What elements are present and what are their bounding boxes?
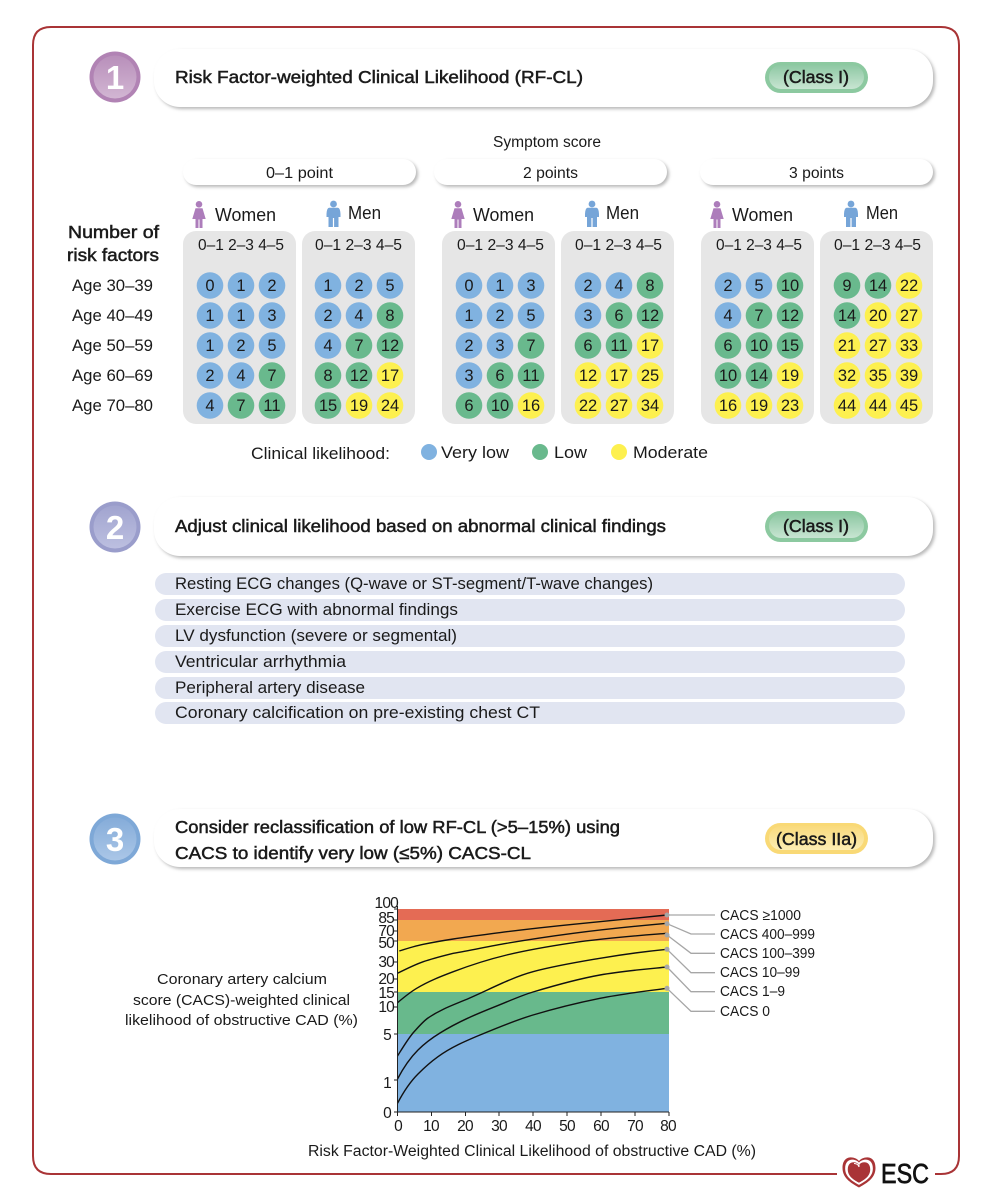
panel: women, 2 points: 6 (464, 397, 474, 415)
panel: women, 3 points: 5 (754, 277, 764, 295)
step 2 header bar (154, 497, 933, 556)
panel: men, 0-1 point: 2 (354, 277, 364, 295)
likelihood chart: 30 (491, 1118, 508, 1135)
abnormal findings list: Ventricular arrhythmia (175, 652, 347, 671)
likelihood chart: 20 (378, 971, 395, 988)
step 3 badge: 3 (106, 821, 124, 858)
symptom pill: 3 points (700, 159, 933, 185)
panel: men, 3 points: 33 (900, 337, 918, 355)
panel: men, 0-1 point: 12 (350, 367, 368, 385)
panel: men, 3 points: 44 (869, 397, 887, 415)
panel: women, 3 points: 10 (750, 337, 768, 355)
CACS curve labels: CACS 400–999 (720, 927, 815, 943)
panel: women, 0-1 point: 2 (236, 337, 246, 355)
panel: women, 0-1 point: 7 (236, 397, 246, 415)
panel: men, 0-1 point: 15 (319, 397, 337, 415)
likelihood chart: 50 (378, 935, 395, 952)
likelihood chart: 1 (383, 1075, 391, 1092)
panel: women, 3 points: 19 (750, 397, 768, 415)
CACS curve labels: CACS 10–99 (720, 965, 800, 981)
women label, group 2: Women (473, 205, 534, 225)
abnormal findings list: Coronary calcification on pre-existing chest CT (175, 703, 540, 722)
panel: men, 3 points: 22 (900, 277, 918, 295)
panel: women, 0-1 point (183, 231, 296, 424)
panel: women, 2 points: 2 (464, 337, 474, 355)
step 3 header bar: Consider reclassification of low RF-CL (>5–15%) using (175, 817, 620, 837)
panel: women, 2 points: 0–1 2–3 4–5 (457, 237, 544, 254)
panel: men, 3 points: 27 (869, 337, 887, 355)
panel: women, 2 points: 1 (495, 277, 505, 295)
step 3 header bar (154, 809, 933, 867)
likelihood chart: 70 (627, 1118, 644, 1135)
panel: men, 3 points: 44 (838, 397, 856, 415)
panel: women, 2 points: 0 (464, 277, 474, 295)
panel: women, 3 points: 2 (723, 277, 733, 295)
step 1 header bar (154, 49, 933, 107)
likelihood chart (375, 895, 677, 1135)
panel: women, 0-1 point: 1 (205, 337, 215, 355)
CACS curve labels: CACS ≥1000 (720, 908, 801, 924)
panel: men, 2 points: 11 (610, 337, 628, 355)
legend: clinical likelihood: Moderate (633, 443, 708, 462)
panel: men, 2 points: 0–1 2–3 4–5 (575, 237, 662, 254)
panel: women, 0-1 point: 1 (236, 277, 246, 295)
panel: women, 0-1 point: 11 (263, 397, 281, 415)
women label, group 2 (451, 201, 534, 228)
men label, group 1: Men (348, 203, 381, 223)
panel: women, 0-1 point: 4 (205, 397, 215, 415)
panel: men, 2 points: 6 (583, 337, 593, 355)
step 2 class badge: (Class I) (783, 516, 849, 536)
panel: men, 0-1 point: 19 (350, 397, 368, 415)
y axis title: score (CACS)-weighted clinical (133, 992, 350, 1009)
age row labels: Age 70–80 (72, 397, 153, 415)
CACS curve labels: CACS 0 (720, 1004, 770, 1020)
panel: women, 2 points: 2 (495, 307, 505, 325)
symptom pill: 0-1 point: 0–1 point (266, 165, 334, 182)
likelihood chart: 80 (660, 1118, 677, 1135)
men label, group 2 (585, 201, 639, 227)
men label, group 2: Men (606, 203, 639, 223)
panel: men, 3 points: 14 (869, 277, 887, 295)
step 2 header bar: Adjust clinical likelihood based on abnormal clinical findings (175, 516, 666, 536)
panel: women, 3 points: 10 (719, 367, 737, 385)
panel: men, 3 points: 27 (900, 307, 918, 325)
panel: men, 0-1 point (302, 231, 415, 424)
legend: clinical likelihood (251, 443, 708, 463)
step 2 badge: 2 (106, 509, 124, 546)
step 3 class badge (765, 823, 868, 854)
panel: women, 3 points: 6 (723, 337, 733, 355)
panel: women, 3 points: 4 (723, 307, 733, 325)
y axis title (125, 971, 358, 1029)
women label, group 3 (710, 201, 793, 228)
panel: men, 3 points: 35 (869, 367, 887, 385)
CACS curve labels (720, 908, 815, 1020)
step 3 class badge: (Class IIa) (776, 829, 857, 849)
panel: women, 3 points: 12 (781, 307, 799, 325)
panel: men, 0-1 point: 24 (381, 397, 399, 415)
panel: men, 2 points: 17 (641, 337, 659, 355)
ESC logo (842, 1157, 929, 1189)
panel: men, 3 points: 9 (842, 277, 852, 295)
women label, group 3: Women (732, 205, 793, 225)
symptom pill: 0-1 point (183, 159, 416, 185)
step 2 badge (90, 502, 140, 552)
panel: women, 2 points: 6 (495, 367, 505, 385)
panel: women, 3 points: 14 (750, 367, 768, 385)
likelihood chart: 40 (525, 1118, 542, 1135)
women label, group 1: Women (215, 205, 276, 225)
panel: men, 3 points: 39 (900, 367, 918, 385)
panel: men, 2 points: 4 (614, 277, 624, 295)
men label, group 3 (844, 201, 898, 227)
step 1 class badge: (Class I) (783, 67, 849, 87)
panel: women, 0-1 point: 4 (236, 367, 246, 385)
likelihood chart: 50 (559, 1118, 576, 1135)
panel: men, 0-1 point: 7 (354, 337, 364, 355)
row heading: number of risk factors: Number of (68, 222, 159, 242)
symptom pill: 3 points: 3 points (789, 165, 844, 182)
panel: women, 0-1 point: 7 (267, 367, 277, 385)
step 1 header bar: Risk Factor-weighted Clinical Likelihood (RF-CL) (175, 67, 583, 87)
panel: men, 0-1 point: 12 (381, 337, 399, 355)
abnormal findings list (155, 573, 905, 724)
men label, group 3: Men (866, 203, 898, 223)
likelihood chart: 30 (378, 954, 395, 971)
age row labels: Age 50–59 (72, 337, 153, 355)
symptom score heading: Symptom score (493, 134, 601, 151)
panel: women, 0-1 point: 1 (236, 307, 246, 325)
age row labels: Age 60–69 (72, 367, 153, 385)
age row labels: Age 40–49 (72, 307, 153, 325)
step 1 badge (90, 52, 140, 102)
panel: men, 0-1 point: 2 (323, 307, 333, 325)
abnormal findings list: Peripheral artery disease (175, 678, 365, 697)
panel: men, 3 points (820, 231, 933, 424)
panel: men, 2 points: 12 (641, 307, 659, 325)
step 1 class badge (765, 62, 868, 93)
likelihood chart: 5 (383, 1027, 391, 1044)
likelihood chart: 15 (378, 985, 394, 1002)
panel: men, 2 points: 27 (610, 397, 628, 415)
panel: men, 2 points (561, 231, 674, 424)
likelihood chart: 0 (394, 1118, 403, 1135)
panel: women, 0-1 point: 0 (205, 277, 215, 295)
panel: women, 3 points: 15 (781, 337, 799, 355)
panel: women, 2 points: 16 (522, 397, 540, 415)
likelihood chart: 0 (383, 1105, 392, 1122)
panel: women, 3 points: 10 (781, 277, 799, 295)
step 2 class badge (765, 511, 868, 542)
panel: women, 0-1 point: 3 (267, 307, 277, 325)
likelihood chart: 60 (593, 1118, 610, 1135)
panel: women, 0-1 point: 2 (267, 277, 277, 295)
panel: men, 3 points: 14 (838, 307, 856, 325)
panel: women, 3 points: 16 (719, 397, 737, 415)
panel: women, 3 points: 23 (781, 397, 799, 415)
panel: men, 2 points: 17 (610, 367, 628, 385)
panel: men, 0-1 point: 8 (323, 367, 333, 385)
panel: women, 2 points: 3 (495, 337, 505, 355)
panel: men, 2 points: 34 (641, 397, 659, 415)
symptom pill: 2 points (434, 159, 667, 185)
panel: women, 2 points: 1 (464, 307, 474, 325)
panel: women, 2 points: 3 (526, 277, 536, 295)
legend: clinical likelihood: Clinical likelihood: (251, 444, 390, 463)
panel: women, 3 points: 7 (754, 307, 764, 325)
likelihood chart: 85 (378, 910, 394, 927)
panel: men, 2 points: 8 (645, 277, 655, 295)
panel: men, 3 points: 45 (900, 397, 918, 415)
panel: men, 3 points: 20 (869, 307, 887, 325)
panel: men, 2 points: 25 (641, 367, 659, 385)
likelihood chart: 10 (378, 999, 395, 1016)
likelihood chart: 70 (378, 923, 395, 940)
panel: women, 3 points (701, 231, 814, 424)
row heading: number of risk factors (67, 222, 159, 265)
y axis title: Coronary artery calcium (157, 971, 327, 988)
panel: women, 2 points: 5 (526, 307, 536, 325)
likelihood chart: 10 (423, 1118, 440, 1135)
panel: men, 2 points: 3 (583, 307, 593, 325)
age row labels (72, 277, 153, 415)
panel: men, 2 points: 22 (579, 397, 597, 415)
panel: men, 0-1 point: 8 (385, 307, 395, 325)
legend: clinical likelihood: Low (554, 443, 588, 462)
age row labels: Age 30–39 (72, 277, 153, 295)
panel: women, 0-1 point: 1 (205, 307, 215, 325)
panel: men, 0-1 point: 1 (323, 277, 333, 295)
x axis title: Risk Factor-Weighted Clinical Likelihood of obstructive CAD (%) (308, 1143, 756, 1160)
panel: men, 0-1 point: 4 (323, 337, 333, 355)
y axis title: likelihood of obstructive CAD (%) (125, 1012, 358, 1029)
panel: men, 0-1 point: 4 (354, 307, 364, 325)
step 1 badge: 1 (106, 59, 124, 96)
panel: men, 0-1 point: 0–1 2–3 4–5 (315, 237, 402, 254)
panel: women, 0-1 point: 0–1 2–3 4–5 (198, 237, 284, 254)
women label, group 1 (192, 201, 276, 228)
panel: women, 3 points: 0–1 2–3 4–5 (716, 237, 802, 254)
panel: women, 2 points: 3 (464, 367, 474, 385)
likelihood chart: 100 (375, 895, 399, 912)
abnormal findings list: LV dysfunction (severe or segmental) (175, 626, 457, 645)
panel: men, 0-1 point: 17 (381, 367, 399, 385)
row heading: number of risk factors: risk factors (67, 245, 159, 265)
panel: men, 3 points: 32 (838, 367, 856, 385)
abnormal findings list: Exercise ECG with abnormal findings (175, 600, 458, 619)
abnormal findings list: Resting ECG changes (Q-wave or ST-segment/T-wave changes) (175, 574, 653, 593)
panel: women, 3 points: 19 (781, 367, 799, 385)
CACS curve labels: CACS 100–399 (720, 946, 815, 962)
panel: men, 2 points: 2 (583, 277, 593, 295)
ESC logo: ESC (881, 1158, 929, 1189)
step 3 badge (90, 814, 140, 864)
panel: men, 2 points: 6 (614, 307, 624, 325)
panel: women, 2 points: 11 (522, 367, 540, 385)
panel: men, 3 points: 21 (838, 337, 856, 355)
CACS leader lines (664, 912, 715, 1011)
panel: women, 2 points: 7 (526, 337, 536, 355)
likelihood chart: 20 (457, 1118, 474, 1135)
panel: women, 2 points: 10 (491, 397, 509, 415)
panel: women, 0-1 point: 2 (205, 367, 215, 385)
CACS curve labels: CACS 1–9 (720, 984, 785, 1000)
step 3 header bar: CACS to identify very low (≤5%) CACS-CL (175, 843, 531, 863)
legend: clinical likelihood: Very low (441, 443, 510, 462)
panel: women, 2 points (442, 231, 555, 424)
panel: men, 3 points: 0–1 2–3 4–5 (834, 237, 921, 254)
panel: women, 0-1 point: 5 (267, 337, 277, 355)
panel: men, 0-1 point: 5 (385, 277, 395, 295)
panel: men, 2 points: 12 (579, 367, 597, 385)
symptom pill: 2 points: 2 points (523, 165, 578, 182)
men label, group 1 (326, 201, 381, 227)
